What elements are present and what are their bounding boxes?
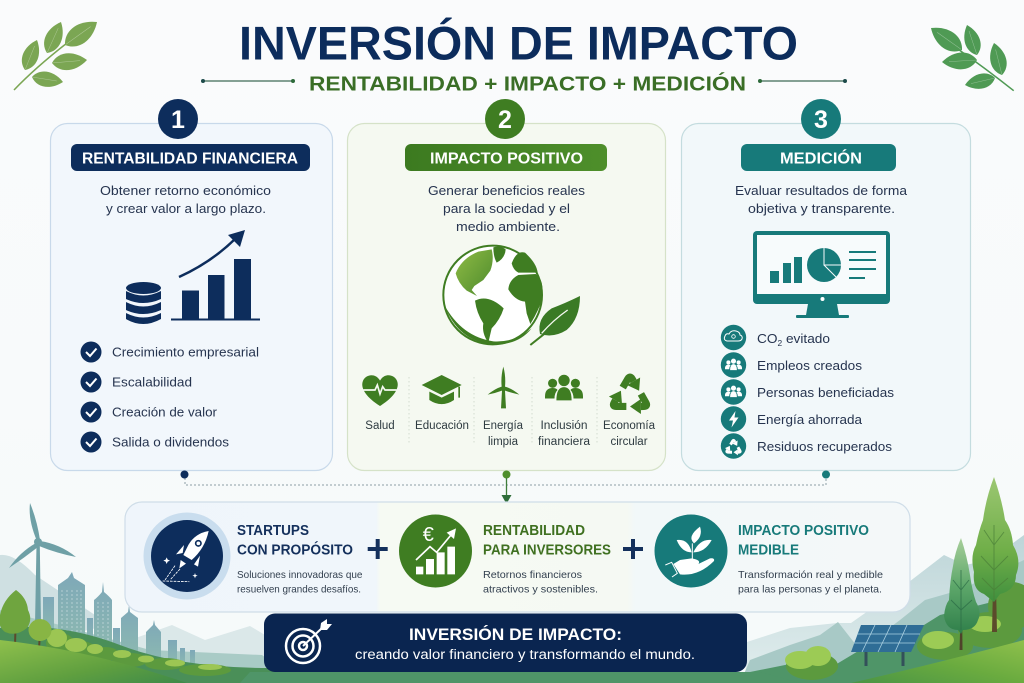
icon: rocket — [163, 531, 209, 582]
connector lines to summary — [180, 470, 830, 504]
number badge 2: 2 — [498, 106, 512, 134]
icon: educacion: Educación — [415, 420, 469, 432]
plus sign — [368, 539, 388, 559]
description: y crear valor a largo plazo. — [106, 201, 266, 216]
heading label: MEDICIÓN — [780, 148, 862, 168]
metrics list — [721, 325, 895, 459]
heading label — [71, 144, 310, 171]
metric: residuos — [721, 433, 893, 459]
icon: inclusion financiera: Inclusión — [540, 420, 588, 432]
icon: salud — [362, 375, 398, 432]
bushes right — [786, 582, 1024, 680]
icon: educacion — [415, 375, 469, 432]
check item — [80, 402, 218, 422]
icon: euro growth chart — [416, 524, 456, 574]
icon: energia limpia — [483, 367, 524, 448]
summary: rentabilidad: Retornos financieros — [483, 569, 582, 581]
metric: CO2: 2 — [777, 339, 783, 348]
check item — [80, 432, 230, 452]
heading label: IMPACTO POSITIVO — [430, 150, 583, 168]
description — [100, 183, 271, 216]
check item: Salida o dividendos — [112, 434, 230, 450]
check item — [80, 372, 192, 392]
description: Obtener retorno económico — [100, 183, 271, 198]
metric: empleos: Empleos creados — [757, 358, 863, 373]
bushes ridge — [46, 633, 231, 676]
number badge 1: 1 — [171, 106, 185, 134]
metric: personas: Personas beneficiadas — [757, 385, 895, 400]
description: Generar beneficios reales — [428, 183, 586, 198]
metric: personas — [721, 379, 895, 405]
checklist — [80, 342, 259, 452]
impact icons row — [362, 367, 656, 448]
number badge 3 — [801, 99, 841, 139]
title: INVERSIÓN DE IMPACTO — [239, 16, 798, 70]
panel: impacto positivo — [348, 99, 666, 470]
description: para la sociedad y el — [443, 201, 570, 216]
check item — [80, 342, 259, 362]
solar panel — [851, 625, 924, 666]
check item: Escalabilidad — [112, 374, 192, 390]
check item: Creación de valor — [112, 404, 218, 420]
icon: economia circular — [603, 377, 656, 448]
summary: impacto medible — [654, 514, 883, 596]
icon: coin stack — [126, 282, 161, 324]
heading label — [405, 144, 607, 171]
number badge 3: 3 — [814, 106, 828, 134]
description — [428, 183, 586, 234]
plus sign — [623, 539, 643, 559]
summary: startups: Soluciones innovadoras que — [237, 569, 363, 581]
description: Evaluar resultados de forma — [735, 183, 908, 198]
city skyline — [43, 572, 195, 666]
summary: rentabilidad: PARA INVERSORES — [483, 542, 611, 558]
conclusion banner — [264, 614, 747, 672]
icon: inclusion financiera: financiera — [538, 436, 591, 448]
metric: energia — [721, 406, 863, 432]
icon: hand with plant — [665, 527, 714, 577]
icon: energia limpia: Energía — [483, 420, 524, 432]
summary: startups — [144, 512, 363, 600]
heading label: RENTABILIDAD FINANCIERA — [82, 150, 298, 168]
icon: globe with leaf — [443, 246, 580, 345]
summary: impacto medible: Transformación real y medible — [738, 569, 883, 581]
conclusion banner: creando valor financiero y transformando el mundo. — [355, 647, 695, 662]
summary: rentabilidad: atractivos y sostenibles. — [483, 584, 598, 596]
conclusion banner: INVERSIÓN DE IMPACTO: — [409, 625, 622, 644]
icon: inclusion financiera — [538, 375, 591, 448]
summary: startups: CON PROPÓSITO — [237, 540, 353, 558]
summary: impacto medible: para las personas y el planeta. — [738, 584, 882, 596]
subtitle rule right — [758, 79, 847, 83]
panel: medicion — [682, 99, 970, 470]
panel: rentabilidad financiera — [50, 99, 332, 470]
wind turbine — [9, 503, 76, 625]
number badge 1 — [158, 99, 198, 139]
summary: impacto medible: IMPACTO POSITIVO — [738, 523, 869, 539]
summary: startups: STARTUPS — [237, 523, 309, 539]
panel: summary — [125, 502, 910, 612]
subtitle rule left — [201, 79, 295, 83]
metric: CO2: evitado — [782, 331, 830, 346]
slim tree — [944, 538, 980, 650]
landscape: right with mountains, solar panel and trees — [240, 477, 1024, 683]
description — [735, 183, 908, 216]
leaf branch top right — [926, 21, 1014, 92]
icon: monitor with dashboard — [753, 231, 890, 318]
icon: energia limpia: limpia — [488, 436, 519, 448]
number badge 2 — [485, 99, 525, 139]
metric: CO2 — [721, 325, 830, 350]
icon: economia circular: Economía — [603, 420, 656, 432]
description: objetiva y transparente. — [748, 201, 895, 216]
metric: CO2: CO — [757, 331, 776, 346]
icon: target with arrow — [286, 619, 332, 663]
summary: startups: resuelven grandes desafíos. — [237, 584, 361, 596]
metric: residuos: Residuos recuperados — [757, 439, 893, 454]
icon: growth bar chart — [171, 230, 260, 320]
subtitle: RENTABILIDAD + IMPACTO + MEDICIÓN — [309, 72, 746, 96]
icon: salud: Salud — [365, 420, 395, 432]
icon: euro growth chart: € — [423, 524, 434, 546]
icon: economia circular: circular — [610, 436, 648, 448]
metric: energia: Energía ahorrada — [757, 412, 863, 427]
check item: Crecimiento empresarial — [112, 344, 259, 360]
big tree — [972, 477, 1018, 632]
heading label — [741, 144, 896, 171]
description: medio ambiente. — [456, 219, 560, 234]
landscape: left with wind turbine, city and trees — [0, 503, 340, 683]
metric: empleos — [721, 352, 863, 378]
summary: rentabilidad — [399, 514, 611, 596]
leaf branch top left — [14, 14, 103, 90]
summary: rentabilidad: RENTABILIDAD — [483, 523, 585, 539]
summary: impacto medible: MEDIBLE — [738, 542, 799, 558]
left trees — [15, 612, 40, 650]
